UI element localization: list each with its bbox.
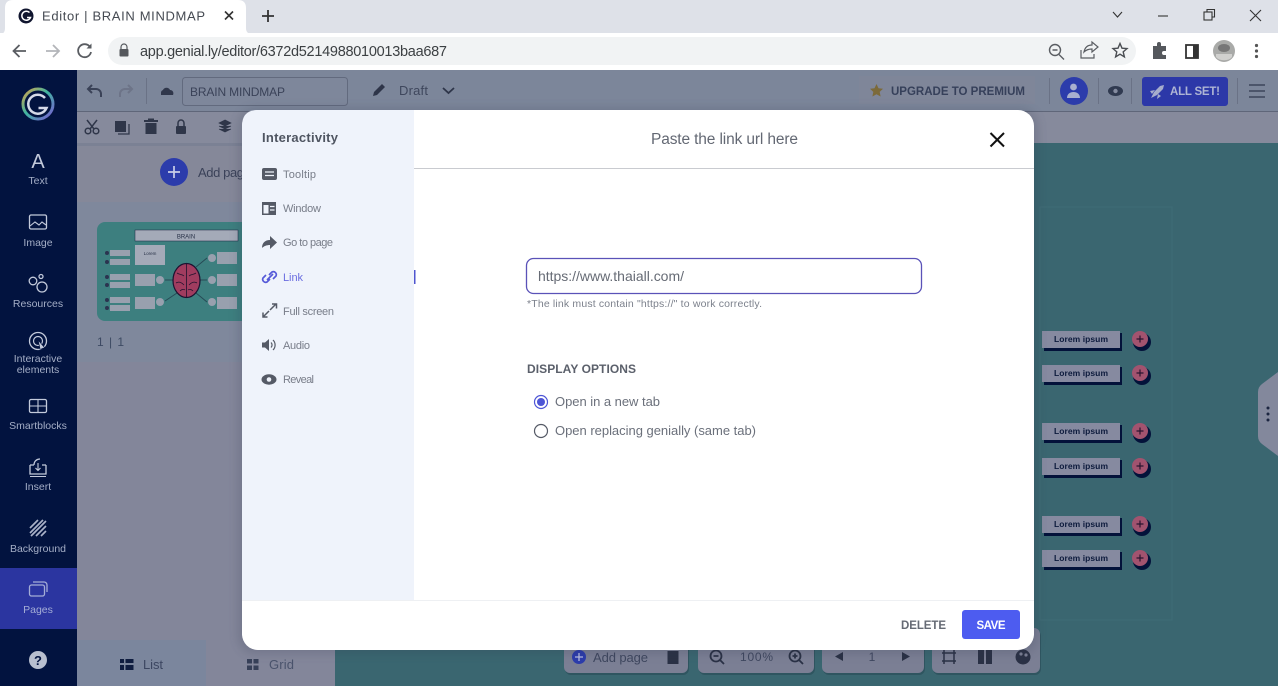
all set button: ALL SET! xyxy=(1170,86,1220,98)
lorem ipsum row 4: Lorem ipsum xyxy=(1054,461,1108,471)
modal heading: Paste the link url here xyxy=(651,131,798,148)
delete button: DELETE xyxy=(901,620,946,632)
sidebar item: resources: Resources xyxy=(13,298,63,310)
menu item: audio: Audio xyxy=(283,340,310,352)
page thumbnail: BRAIN xyxy=(177,234,195,240)
menu item: full screen xyxy=(263,304,334,318)
canvas lorem ipsum buttons xyxy=(1042,331,1151,570)
page thumbnail xyxy=(97,222,257,349)
project title field xyxy=(161,78,348,106)
sidebar item: text: A xyxy=(31,151,45,173)
page navigation group: 1 xyxy=(869,650,876,664)
sidebar item: interactive elements xyxy=(14,332,62,376)
brain illustration xyxy=(173,264,200,298)
new tab button xyxy=(262,10,274,22)
page thumbnail: 1 | 1 xyxy=(97,335,124,349)
interactivity side panel: Interactivity xyxy=(262,130,339,145)
lorem ipsum row 5 xyxy=(1042,516,1151,536)
url input xyxy=(526,258,922,294)
draft status: Draft xyxy=(399,83,428,98)
list view icon xyxy=(120,657,163,672)
zoom group: 100% xyxy=(740,650,773,664)
lorem ipsum row 1: Lorem ipsum xyxy=(1054,334,1108,344)
help icon xyxy=(29,651,47,669)
all set button xyxy=(1142,77,1228,106)
sidebar item: smartblocks xyxy=(9,400,67,432)
sidebar item: insert xyxy=(25,459,51,493)
url field: app.genial.ly/editor/6372d5214988010013baa687 xyxy=(140,44,447,60)
add page button xyxy=(160,158,244,186)
sidebar item: text xyxy=(28,151,48,187)
sidebar item: image: Image xyxy=(23,237,53,249)
view tools group xyxy=(932,628,1041,675)
browser extension icons xyxy=(1153,40,1258,62)
menu item: go to page: Go to page xyxy=(283,237,333,249)
lorem ipsum row 6: Lorem ipsum xyxy=(1054,553,1108,563)
radio: open replacing genially: Open replacing genially (same tab) xyxy=(555,423,756,438)
bottom canvas toolbar xyxy=(564,628,1041,675)
menu item: window: Window xyxy=(283,203,321,215)
lorem ipsum row 3: Lorem ipsum xyxy=(1054,426,1108,436)
lorem ipsum row 4 xyxy=(1042,458,1151,478)
menu icon xyxy=(1249,85,1265,97)
add page button: Add pag xyxy=(198,165,244,180)
menu item: tooltip: Tooltip xyxy=(283,169,316,181)
menu item: tooltip xyxy=(262,168,316,181)
close icon xyxy=(990,133,1004,146)
upgrade to premium: UPGRADE TO PREMIUM xyxy=(891,86,1025,98)
browser address bar xyxy=(0,33,1278,70)
url hint: *The link must contain "https://" to work correctly. xyxy=(527,298,762,310)
menu item: go to page xyxy=(262,236,333,249)
add page group: Add page xyxy=(593,650,648,665)
collaborator button xyxy=(1060,77,1088,105)
lorem ipsum row 5: Lorem ipsum xyxy=(1054,519,1108,529)
lorem ipsum row 2: Lorem ipsum xyxy=(1054,368,1108,378)
page navigation group xyxy=(822,628,925,675)
left navigation sidebar xyxy=(0,70,77,686)
lorem ipsum row 3 xyxy=(1042,423,1151,443)
sidebar item: pages (active) xyxy=(0,568,77,629)
secondary tool bar xyxy=(77,112,1278,146)
radio: open in a new tab: Open in a new tab xyxy=(555,394,660,409)
sidebar item: pages (active): Pages xyxy=(23,604,53,616)
top editor toolbar xyxy=(77,70,1278,112)
help icon: ? xyxy=(34,653,42,668)
save button: SAVE xyxy=(976,620,1006,632)
active tab: Editor | BRAIN MINDMAP xyxy=(42,8,205,24)
active tab xyxy=(0,0,252,34)
menu item: link (selected): Link xyxy=(283,272,304,284)
undo and redo icons xyxy=(88,85,132,97)
grid view icon: Grid xyxy=(269,657,294,672)
list view icon: List xyxy=(143,657,163,672)
menu item: reveal xyxy=(262,374,314,386)
page thumbnail: Lorem xyxy=(144,251,157,256)
genially logo xyxy=(23,89,53,119)
sidebar item: smartblocks: Smartblocks xyxy=(9,420,67,432)
sidebar item: resources xyxy=(13,274,63,310)
right side collapsed panel handle xyxy=(1258,372,1278,456)
lorem ipsum row 6 xyxy=(1042,550,1151,570)
window controls xyxy=(1113,10,1261,21)
url input: https://www.thaiall.com/ xyxy=(538,268,684,284)
sidebar item: interactive elements: elements xyxy=(17,364,59,376)
sidebar item: text: Text xyxy=(28,175,48,187)
link settings modal xyxy=(242,110,1034,650)
browser tab strip xyxy=(0,0,1278,34)
upgrade to premium xyxy=(859,76,1035,104)
menu item: link (selected) xyxy=(263,270,416,284)
project title field: BRAIN MINDMAP xyxy=(190,85,285,99)
draft status xyxy=(373,83,454,98)
pages panel xyxy=(77,143,335,686)
sidebar item: insert: Insert xyxy=(25,481,51,493)
navigation buttons xyxy=(14,44,92,57)
lorem ipsum row 2 xyxy=(1042,365,1151,385)
sidebar item: interactive elements: Interactive xyxy=(14,353,62,365)
cut copy delete lock layers icons xyxy=(85,118,231,134)
canvas teal background xyxy=(335,143,1278,686)
interactivity side panel xyxy=(242,110,416,600)
save button xyxy=(962,610,1020,639)
url field xyxy=(108,37,1136,65)
modal shadow xyxy=(238,108,1038,654)
list and grid view tabs xyxy=(77,640,335,686)
menu item: reveal: Reveal xyxy=(283,374,314,386)
lorem ipsum row 1 xyxy=(1042,331,1151,351)
sidebar item: image xyxy=(23,215,53,249)
display options heading: DISPLAY OPTIONS xyxy=(527,362,636,376)
menu item: audio xyxy=(262,339,310,352)
menu item: window xyxy=(262,202,321,215)
preview eye icon xyxy=(1108,86,1123,96)
sidebar item: background xyxy=(10,520,66,555)
zoom group xyxy=(698,628,815,675)
grid view icon xyxy=(247,657,294,672)
add page group xyxy=(564,628,689,675)
menu item: full screen: Full screen xyxy=(283,306,334,318)
sidebar item: background: Background xyxy=(10,543,66,555)
